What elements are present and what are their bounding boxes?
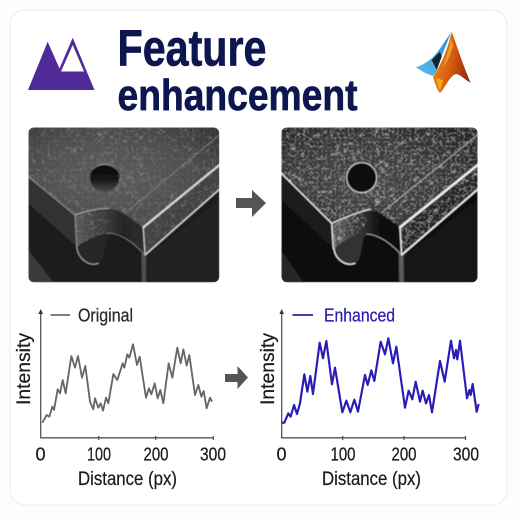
tick labels: 0 [35, 444, 46, 464]
bright edges [28, 135, 219, 264]
tick labels: 300 [200, 444, 226, 464]
chart: enhanced intensity profile [258, 306, 479, 490]
tick labels: 200 [392, 444, 416, 464]
hole [90, 163, 119, 192]
photo: enhanced metal part [281, 127, 478, 282]
bright edges [281, 135, 478, 264]
legend: original: Original [78, 306, 133, 326]
icon: purple mountains [28, 38, 94, 90]
arrow: photo comparison [236, 190, 266, 217]
title: Feature [118, 20, 266, 76]
tick labels [35, 444, 226, 464]
tick labels: 200 [144, 444, 168, 464]
axis label: distance: Distance (px) [78, 468, 177, 490]
tick labels: 300 [453, 444, 479, 464]
tick labels: 100 [87, 444, 111, 464]
axis label: distance: Distance (px) [322, 468, 421, 490]
title: enhancement [118, 71, 358, 120]
icon: MATLAB logo [416, 32, 471, 93]
title [118, 20, 358, 120]
axis label: intensity: Intensity [258, 332, 279, 405]
top face [28, 127, 219, 227]
legend: enhanced [292, 306, 395, 326]
arrow: chart comparison [225, 366, 248, 389]
axes [282, 311, 466, 440]
photo: original metal part [28, 127, 219, 282]
legend: enhanced: Enhanced [324, 306, 395, 326]
axis label: intensity: Intensity [14, 332, 35, 405]
chart: original intensity profile [14, 306, 226, 490]
tick labels: 100 [330, 444, 356, 464]
legend: original [50, 306, 133, 326]
hole [347, 163, 377, 193]
axes [41, 311, 214, 440]
tick labels: 0 [276, 444, 287, 464]
line: original [42, 344, 212, 423]
top face [281, 127, 478, 227]
line: enhanced [282, 338, 479, 423]
tick labels [276, 444, 479, 464]
